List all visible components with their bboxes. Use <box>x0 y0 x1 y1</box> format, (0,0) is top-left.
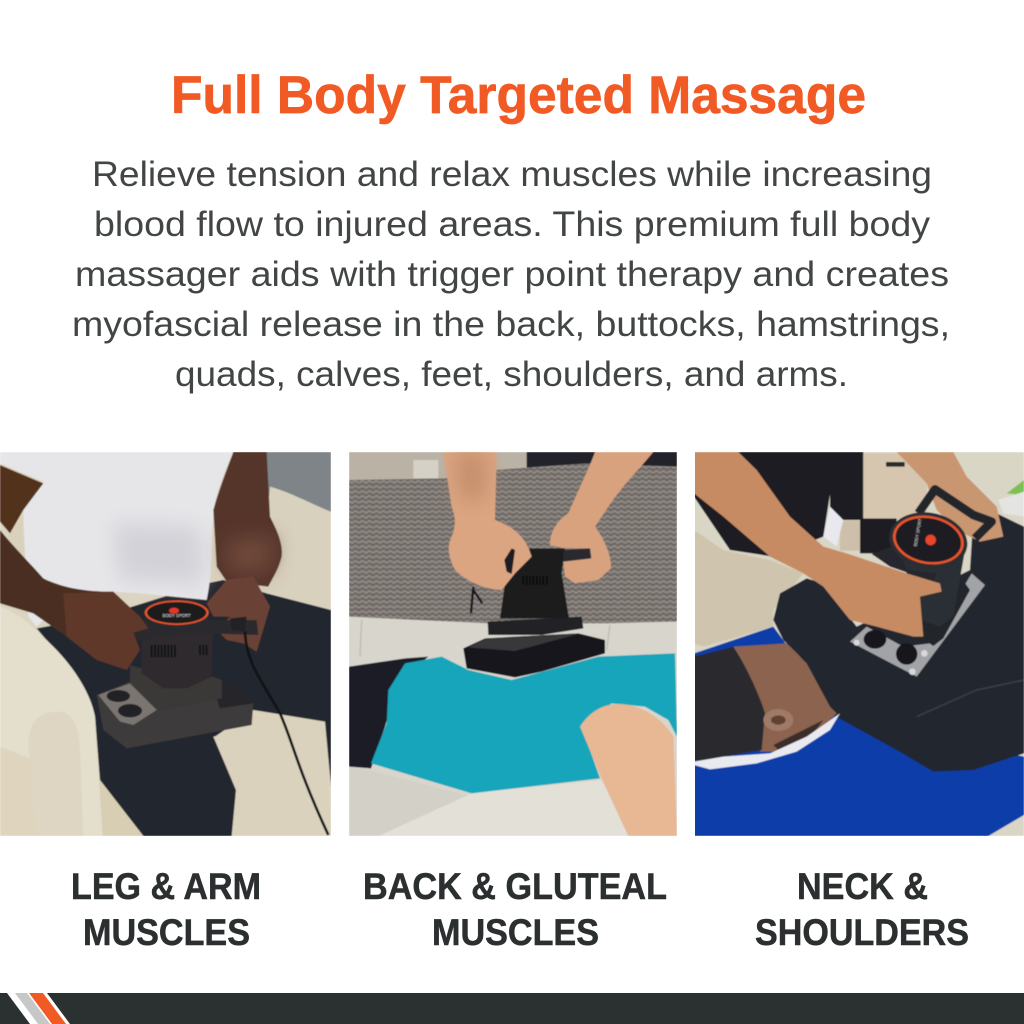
background wall <box>263 452 331 514</box>
label: back and gluteal muscles: BACK & GLUTEAL <box>363 866 667 907</box>
armchair right arm <box>268 486 331 514</box>
vents <box>152 645 207 657</box>
white t-shirt <box>0 452 233 627</box>
massage head right <box>118 704 142 717</box>
motor body <box>897 550 965 627</box>
therapist upper arm and hand <box>897 452 1003 542</box>
footer bar <box>0 993 1024 1024</box>
white cloth background <box>998 492 1024 517</box>
sofa cushion <box>378 780 628 836</box>
drawer handle <box>886 462 905 467</box>
massager body <box>500 548 569 618</box>
brand text: BODY SPORT <box>163 613 191 618</box>
massage head left <box>864 630 886 649</box>
description paragraph: myofascial release in the back, buttocks, hamstrings, <box>72 305 950 344</box>
massager base <box>850 573 985 688</box>
patient hair <box>694 647 765 762</box>
forearm lighter area <box>227 537 273 573</box>
label: leg and arm muscles: MUSCLES <box>83 912 250 953</box>
mount <box>920 578 970 646</box>
title: Full Body Targeted Massage <box>171 66 866 125</box>
cord <box>471 587 482 613</box>
label: back and gluteal muscles <box>363 866 667 953</box>
right hand <box>207 577 270 652</box>
black leggings <box>349 657 428 768</box>
massager mount <box>488 617 583 635</box>
logo <box>169 608 179 614</box>
sofa seams <box>360 620 610 657</box>
lower seat <box>98 778 143 836</box>
woman's arm <box>580 704 677 836</box>
description paragraph: massager aids with trigger point therapy and creates <box>75 255 949 294</box>
handle end <box>504 548 515 574</box>
vents <box>523 576 547 585</box>
room background <box>349 452 528 480</box>
panel: neck and shoulders photo <box>694 452 1024 836</box>
shirt fold <box>917 680 1024 717</box>
therapist lower arm and hand <box>694 452 942 637</box>
dark top shirt <box>527 452 677 468</box>
logo <box>925 535 936 545</box>
brand text: BODY SPORT <box>913 518 923 547</box>
panel: back and gluteal photo <box>349 452 677 836</box>
label: leg and arm muscles: LEG & ARM <box>71 866 261 907</box>
top disc <box>145 600 209 625</box>
right arm and hand <box>550 452 653 583</box>
patient neck and face <box>733 643 837 752</box>
disc rim <box>885 506 972 575</box>
left arm and hand <box>443 452 532 590</box>
description paragraph: blood flow to injured areas. This premium full body <box>94 205 931 244</box>
armchair left arm <box>0 607 103 836</box>
left hand <box>63 592 148 670</box>
seat cushion <box>215 709 326 794</box>
shelf <box>830 452 897 553</box>
green plant <box>1007 480 1024 495</box>
base top plate <box>98 683 157 725</box>
top disc <box>889 510 968 570</box>
shirt shading <box>113 523 203 583</box>
man's right arm <box>213 452 282 587</box>
base top details <box>468 634 578 651</box>
lower sofa <box>349 765 472 836</box>
patient black shirt <box>773 513 1024 772</box>
massage head left <box>107 690 130 702</box>
label: leg and arm muscles <box>71 866 261 953</box>
lighter wall box <box>413 460 438 478</box>
beige trousers <box>694 530 803 647</box>
therapist black shirt <box>694 452 837 557</box>
upper handle <box>918 489 992 538</box>
beard <box>773 720 823 752</box>
cord plug <box>230 616 247 621</box>
description paragraph <box>72 155 950 394</box>
screws <box>854 640 928 675</box>
label: neck and shoulders: NECK & <box>797 866 928 907</box>
label: neck and shoulders <box>755 866 969 953</box>
panel: leg and arm photo <box>0 452 331 836</box>
man's left forearm <box>0 530 115 637</box>
lower handle <box>872 545 937 582</box>
man's upper left arm <box>0 465 43 533</box>
ear <box>763 709 793 731</box>
label: back and gluteal muscles: MUSCLES <box>432 912 599 953</box>
pillow <box>694 713 840 769</box>
massage head right <box>896 643 917 665</box>
base dark corner <box>217 682 252 708</box>
massage table <box>694 627 1024 836</box>
motor cylinder <box>142 634 212 688</box>
drawer <box>863 453 927 518</box>
lower box <box>840 521 860 551</box>
right handle <box>563 548 591 562</box>
left forearm shading <box>455 452 487 500</box>
massager base <box>463 633 605 677</box>
white fabric <box>823 507 843 547</box>
base metal plate <box>850 573 985 677</box>
motor mount <box>130 665 222 700</box>
description paragraph: Relieve tension and relax muscles while increasing <box>92 155 932 194</box>
handles <box>146 618 258 636</box>
massager base <box>97 680 253 748</box>
chair arm front <box>28 712 83 836</box>
teal shirt <box>371 653 677 793</box>
knit blanket <box>349 463 677 623</box>
chair arm base <box>0 747 37 836</box>
label: neck and shoulders: SHOULDERS <box>755 912 969 953</box>
description paragraph: quads, calves, feet, shoulders, and arms. <box>175 355 848 394</box>
chair back left <box>8 513 32 560</box>
dark trousers <box>37 580 331 836</box>
power cord <box>245 632 328 835</box>
